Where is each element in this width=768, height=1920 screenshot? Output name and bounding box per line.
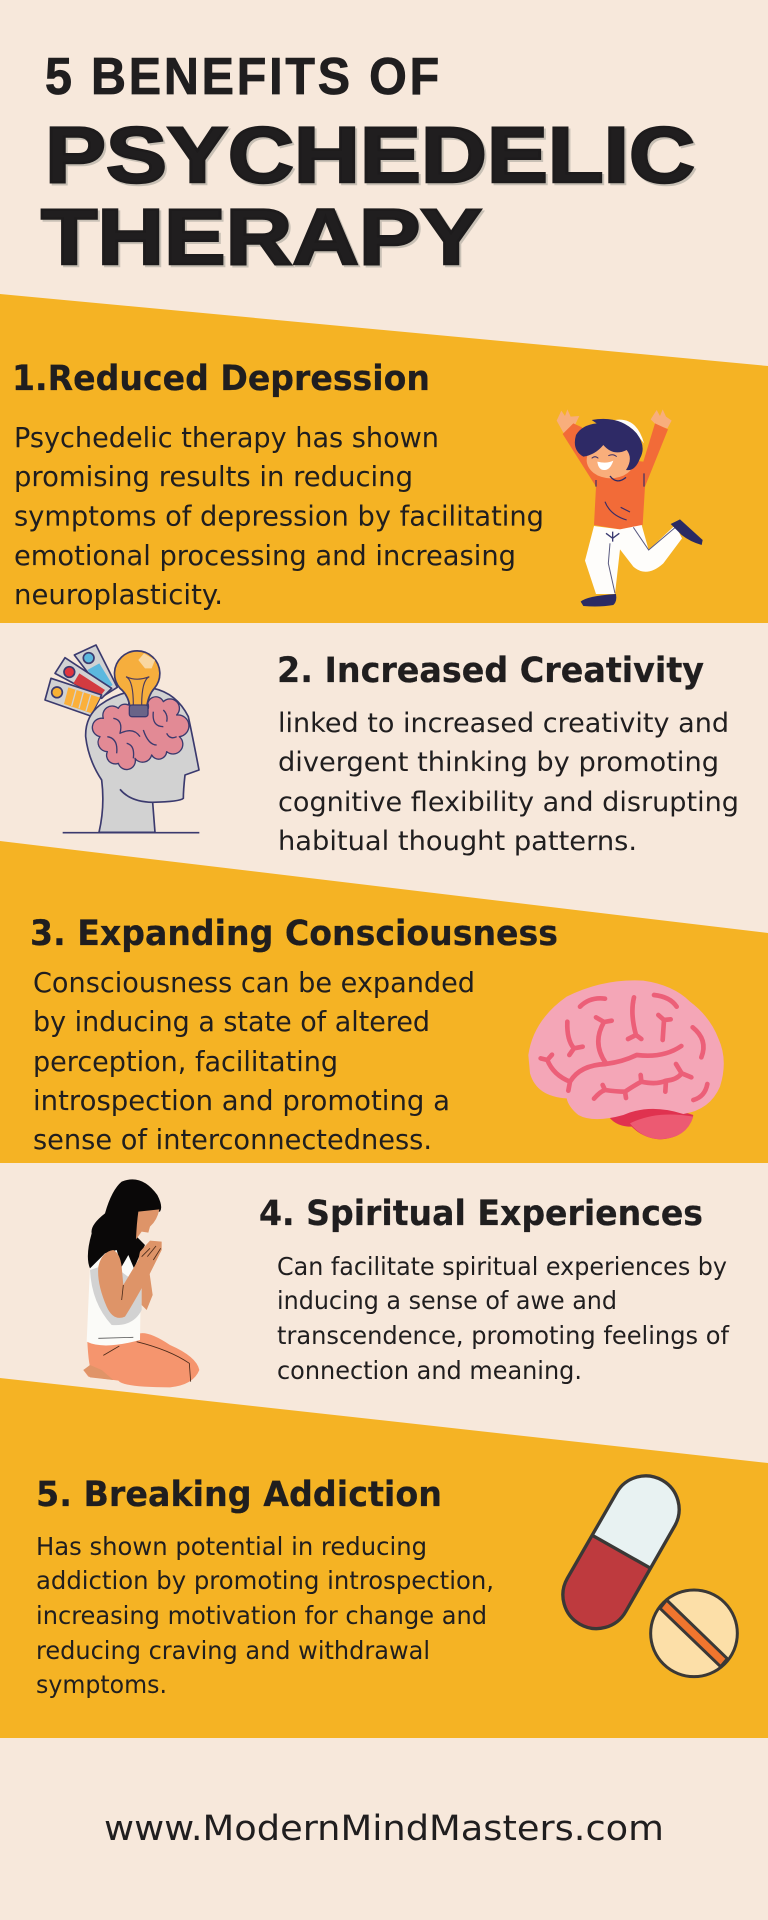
text block: benefit 1: Psychedelic therapy has shown	[14, 422, 439, 454]
brain	[92, 697, 189, 770]
text block: benefit 3: introspection and promoting a	[33, 1085, 450, 1117]
text block: benefit 3: perception, facilitating	[33, 1046, 338, 1078]
face	[136, 1209, 159, 1239]
panel: band 5 background	[0, 1378, 768, 1738]
text block: benefit 3: by inducing a state of altered	[33, 1006, 430, 1038]
heading: benefit 3: 3. Expanding Consciousness	[30, 914, 558, 954]
text block: benefit 1: promising results in reducing	[14, 461, 413, 493]
footer website: www.ModernMindMasters.com	[104, 1809, 664, 1849]
icon: capsule and tablet	[563, 1476, 737, 1677]
icon: jumping happy child	[557, 409, 703, 606]
icon: pink brain	[528, 980, 724, 1139]
text block: benefit 5: increasing motivation for change and	[36, 1601, 487, 1630]
text block: benefit 3	[33, 967, 475, 1156]
swatch fan	[45, 645, 117, 716]
arm and hands	[98, 1241, 162, 1318]
text block: benefit 4	[277, 1252, 730, 1385]
text block: benefit 4: Can facilitate spiritual experiences by	[277, 1252, 727, 1281]
text block: benefit 5: reducing craving and withdrawal	[36, 1636, 430, 1665]
text block: benefit 4: inducing a sense of awe and	[277, 1286, 617, 1315]
heading: benefit 2: 2. Increased Creativity	[277, 651, 704, 691]
text block: benefit 1: symptoms of depression by facilitating	[14, 500, 544, 532]
text block: benefit 1: emotional processing and increasing	[14, 540, 516, 572]
text block: benefit 4: transcendence, promoting feelings of	[277, 1321, 730, 1350]
text block: benefit 2: habitual thought patterns.	[278, 826, 637, 857]
text block: benefit 3: sense of interconnectedness.	[33, 1124, 432, 1156]
text block: benefit 1	[14, 422, 544, 611]
icon: kneeling praying woman	[83, 1179, 199, 1387]
title	[41, 48, 695, 281]
heading: benefit 1: 1.Reduced Depression	[12, 359, 430, 399]
panel: band 3 background	[0, 841, 768, 1163]
text block: benefit 2: cognitive flexibility and disrupting	[278, 787, 739, 818]
title line: therapy: THERAPY	[41, 192, 482, 281]
text block: benefit 2	[278, 708, 739, 857]
heading: benefit 5: 5. Breaking Addiction	[36, 1475, 442, 1515]
second forearm	[142, 1272, 153, 1310]
text block: benefit 2: linked to increased creativity and	[278, 708, 729, 739]
title line: 5 benefits of: 5 BENEFITS OF	[45, 48, 442, 106]
title line: psychedelic: PSYCHEDELIC	[45, 110, 695, 199]
heading: benefit 4: 4. Spiritual Experiences	[259, 1194, 703, 1234]
top	[87, 1237, 141, 1345]
pants and feet	[83, 1333, 199, 1387]
icon: head with brain, light bulb and colour swatches	[45, 645, 199, 833]
text block: benefit 5	[36, 1532, 494, 1699]
head	[86, 688, 199, 832]
base line	[63, 830, 199, 835]
text block: benefit 4: connection and meaning.	[277, 1356, 582, 1385]
panel: band 1 background	[0, 294, 768, 623]
hair	[88, 1179, 161, 1268]
text block: benefit 2: divergent thinking by promoting	[278, 747, 719, 778]
bulb	[114, 651, 160, 707]
text block: benefit 5: addiction by promoting introspection,	[36, 1566, 494, 1595]
text block: benefit 5: symptoms.	[36, 1670, 167, 1699]
text block: benefit 3: Consciousness can be expanded	[33, 967, 475, 999]
text block: benefit 1: neuroplasticity.	[14, 579, 223, 611]
text block: benefit 5: Has shown potential in reducing	[36, 1532, 427, 1561]
